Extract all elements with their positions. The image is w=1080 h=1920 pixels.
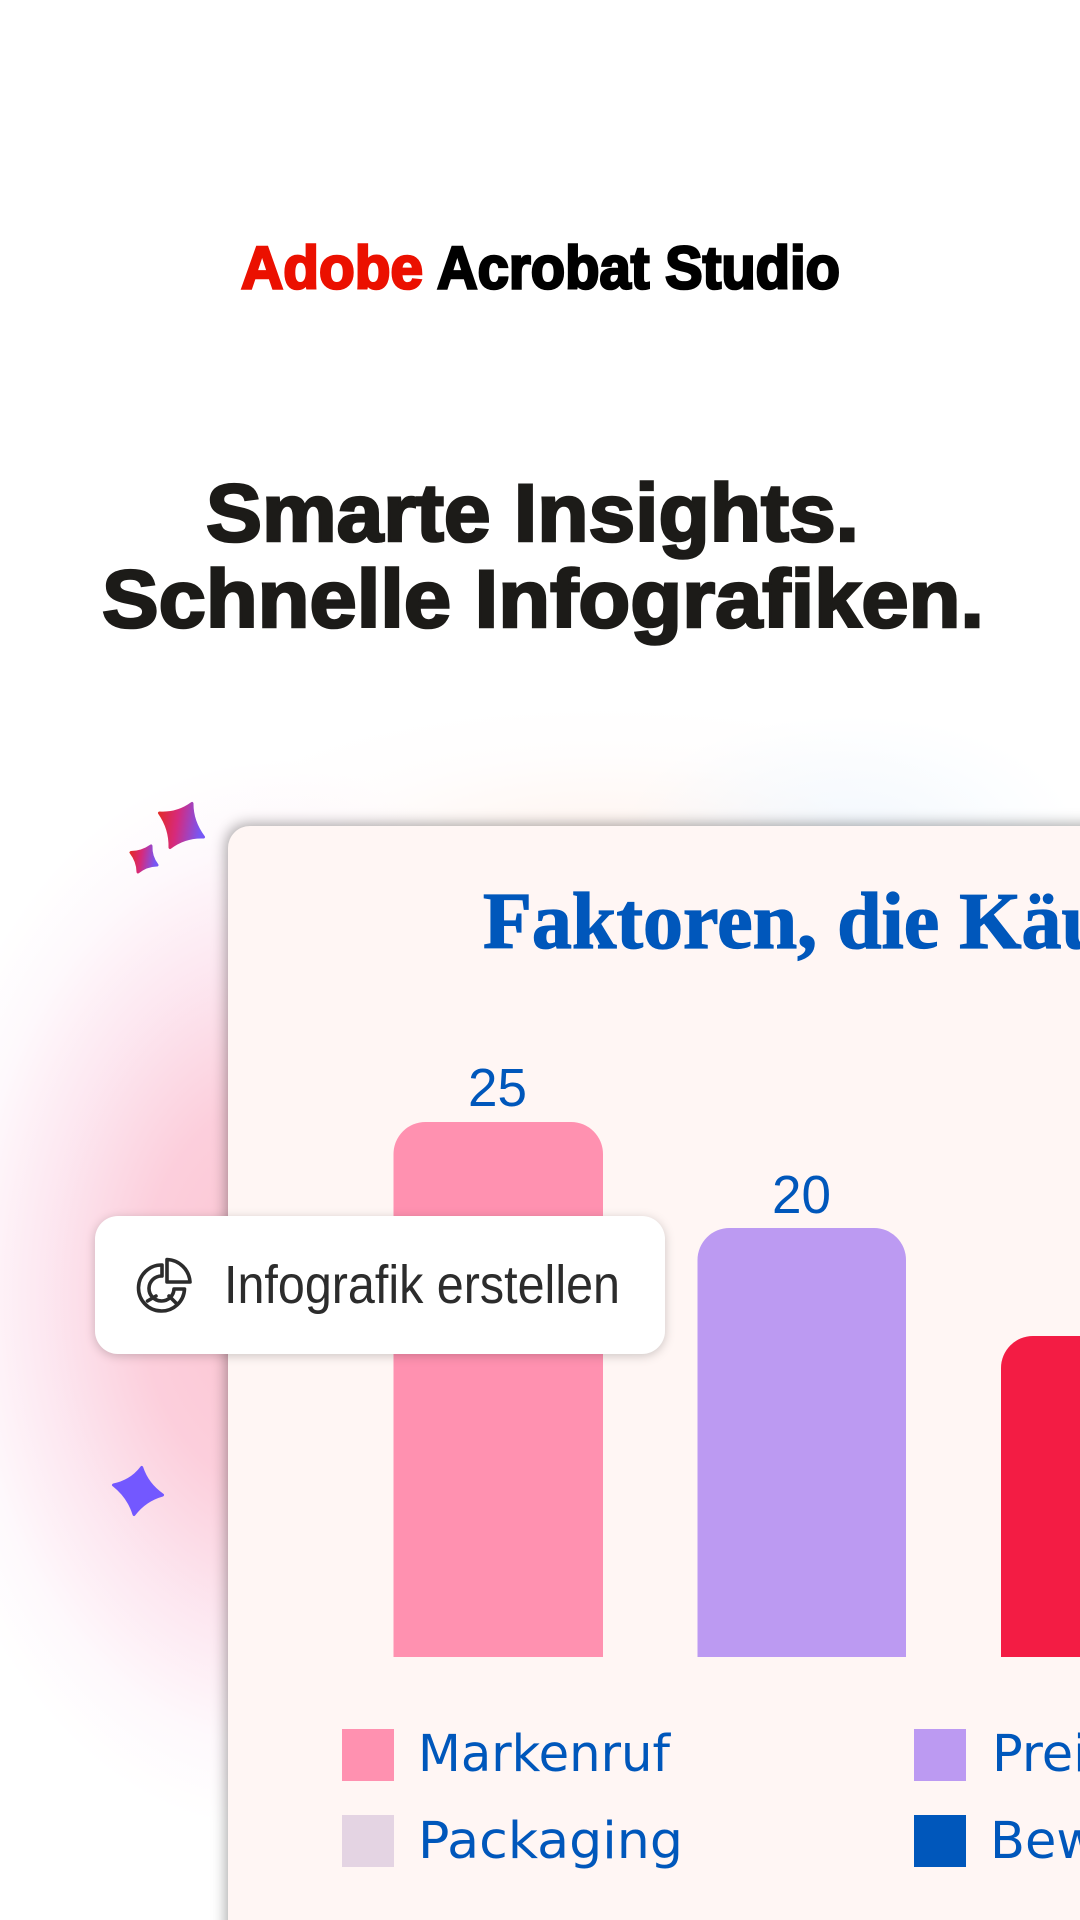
heading: Schnelle Infografiken. (102, 554, 984, 645)
card background (228, 826, 1080, 1920)
bar: Preis 20: 20 (772, 1165, 831, 1225)
legend item: Markenruf: Markenruf (418, 1725, 671, 1784)
bar: Markenruf 25: 25 (468, 1058, 527, 1118)
panel: chart card (228, 826, 1080, 1920)
bar: third factor (1001, 1336, 1080, 1657)
bar: Preis 20 (698, 1165, 906, 1657)
logo: Adobe Acrobat Studio (241, 234, 840, 302)
legend item: Preis (914, 1725, 1080, 1784)
icon: donut chart (139, 1260, 190, 1311)
icon: gradient sparkles (131, 804, 204, 872)
icon: purple sparkle (114, 1468, 162, 1514)
legend item: Packaging: Packaging (418, 1812, 683, 1871)
heading (102, 468, 984, 645)
logo: Adobe Acrobat Studio: Acrobat Studio (437, 234, 840, 302)
button: Infografik erstellen (95, 1216, 665, 1354)
button background (95, 1216, 665, 1354)
bar: Markenruf 25 (394, 1058, 603, 1657)
logo: Adobe Acrobat Studio: Adobe (241, 234, 423, 302)
heading: Smarte Insights. (206, 468, 859, 559)
button label: Infografik erstellen (224, 1255, 620, 1315)
legend (342, 1725, 1080, 1871)
bar chart (394, 1058, 1080, 1657)
legend item: Bewertungen (914, 1812, 1080, 1871)
